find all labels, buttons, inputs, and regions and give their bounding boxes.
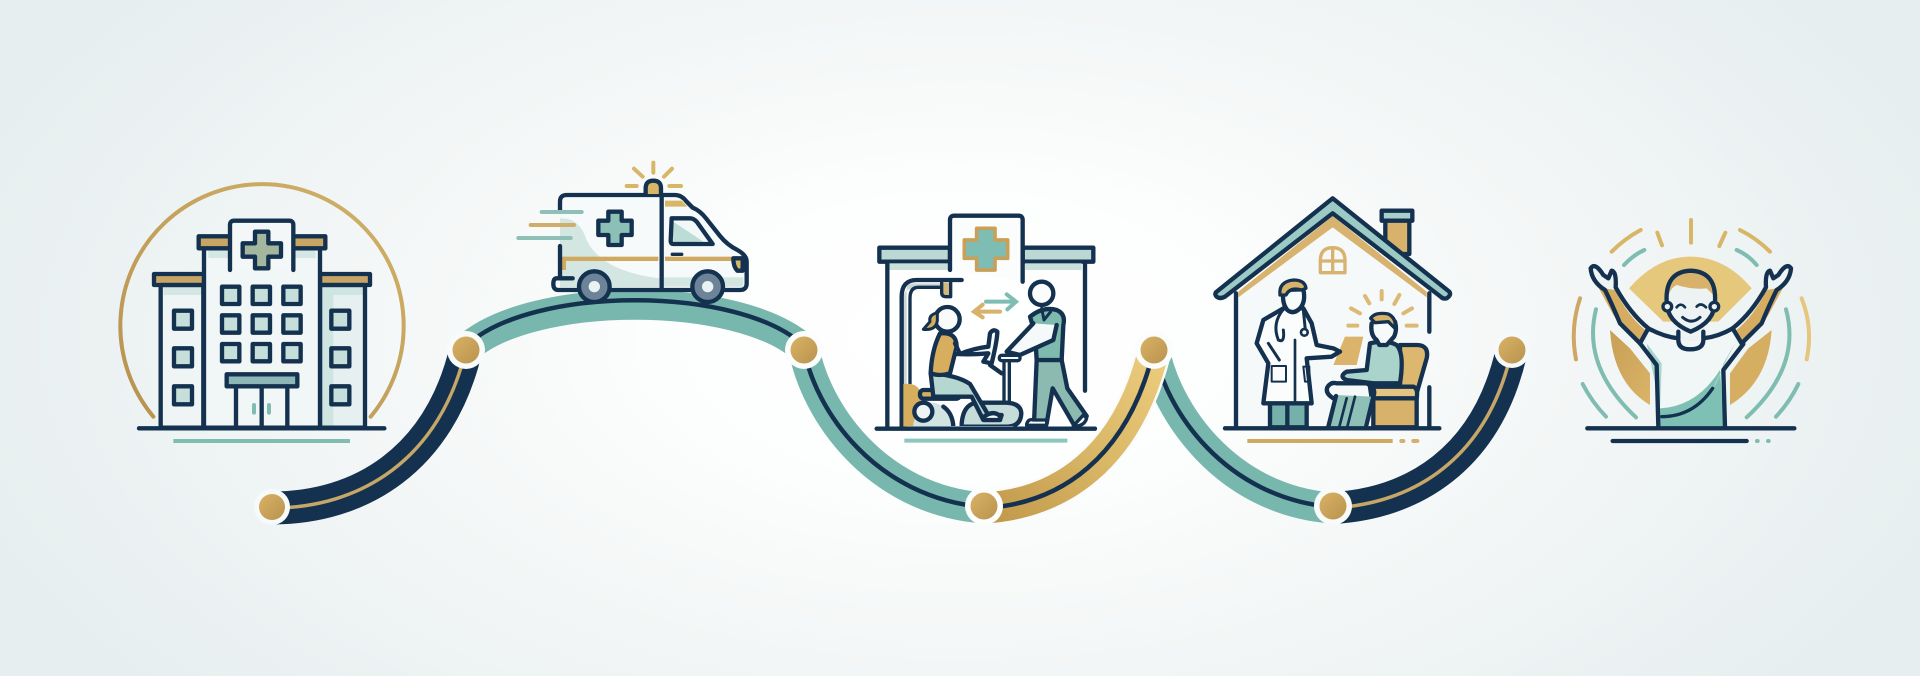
ribbon: teal valley 1: [804, 349, 984, 508]
icon: home care: [1215, 198, 1450, 441]
icon: hospital: [120, 184, 404, 441]
icon: recovered person: [1574, 220, 1809, 441]
path nodes: [254, 331, 1530, 525]
icon: ambulance: [518, 163, 747, 302]
journey path ribbons: [272, 300, 1512, 508]
sun glow pieces: [1610, 257, 1772, 405]
ribbon: teal arch: [466, 300, 804, 349]
ribbon: navy rise: [1332, 349, 1512, 508]
ribbon: navy 1: [272, 349, 466, 508]
ribbon: gold rise: [984, 349, 1154, 508]
ribbon: teal valley 2: [1154, 349, 1332, 508]
icon: rehabilitation: [877, 216, 1095, 441]
